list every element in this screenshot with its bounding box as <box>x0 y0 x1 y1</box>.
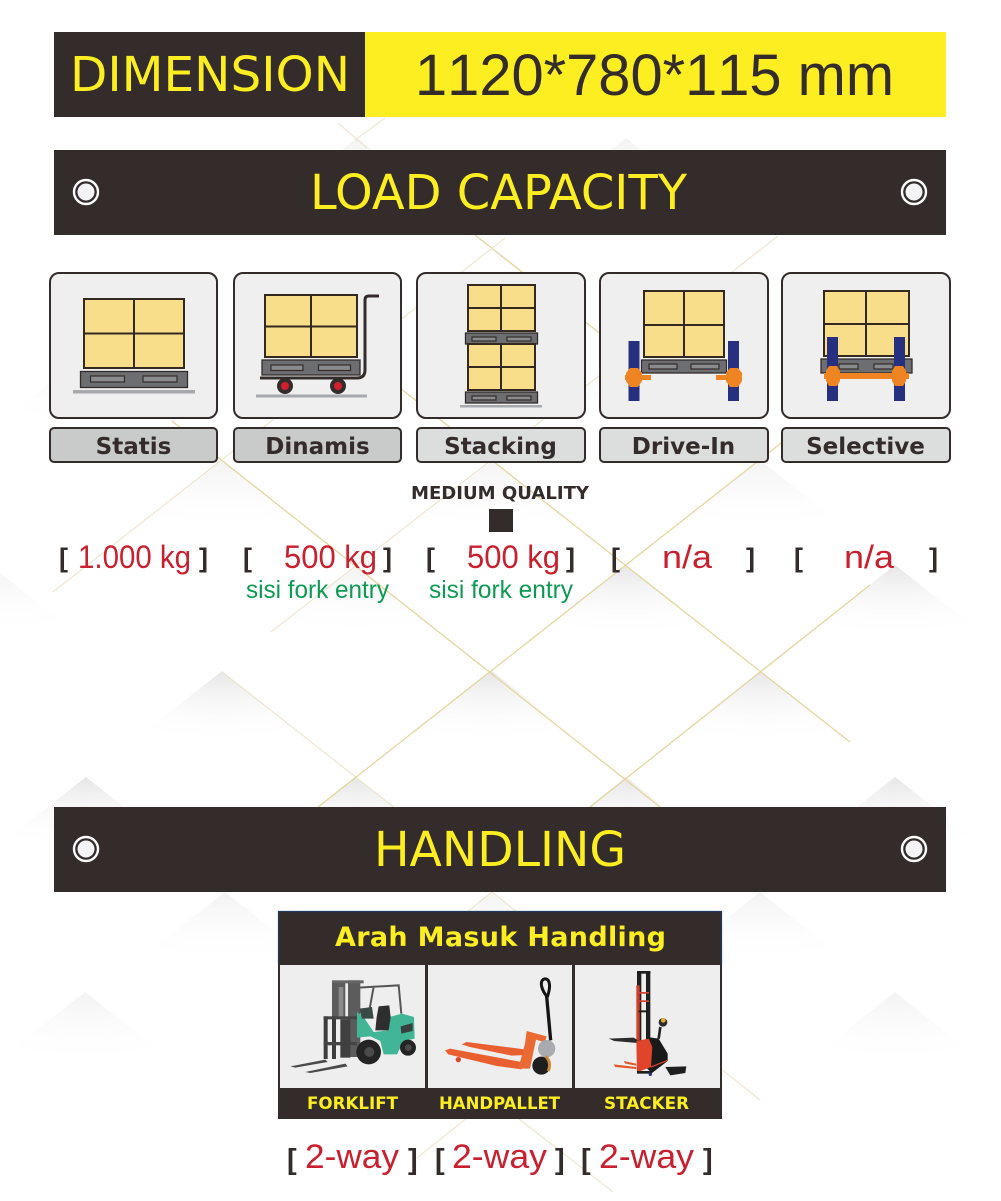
capacity: drive-in <box>611 539 755 575</box>
load capacity heading: LOAD CAPACITY <box>310 165 688 221</box>
handling direction: forklift: ] <box>408 1144 418 1176</box>
handling table <box>278 911 722 1119</box>
label: selective <box>782 428 950 462</box>
capacity: stacking <box>426 539 575 604</box>
medium quality note: MEDIUM QUALITY <box>411 483 590 504</box>
handling direction: stacker: 2-way <box>599 1138 694 1176</box>
handling direction: forklift: [ <box>287 1144 297 1176</box>
load capacity banner <box>54 150 946 235</box>
capacity: stacking: 500 kg <box>467 539 560 575</box>
medium quality note <box>411 483 590 532</box>
label: dinamis: Dinamis <box>265 434 370 460</box>
icon: handpallet <box>445 979 555 1075</box>
label: stacker: STACKER <box>604 1094 689 1113</box>
capacity: stacking: ] <box>566 543 575 573</box>
handling direction: handpallet: ] <box>555 1144 565 1176</box>
label: forklift: FORKLIFT <box>307 1094 399 1113</box>
handling direction: stacker <box>581 1138 713 1176</box>
capacity: dinamis: 500 kg <box>284 539 377 575</box>
handling direction: handpallet: 2-way <box>452 1138 547 1176</box>
capacity: dinamis: ] <box>383 543 392 573</box>
icon: stacker <box>609 971 686 1076</box>
cell: handpallet <box>428 965 572 1088</box>
handling direction: stacker: [ <box>581 1144 591 1176</box>
cell: forklift <box>280 965 425 1088</box>
dimension label: DIMENSION <box>70 47 350 103</box>
card: statis <box>50 273 217 418</box>
capacity: dinamis: [ <box>243 543 252 573</box>
capacity: drive-in: [ <box>611 543 620 573</box>
label: statis <box>50 428 217 462</box>
card: drive-in <box>600 273 768 418</box>
capacity: stacking: [ <box>426 543 435 573</box>
label: stacking <box>417 428 585 462</box>
dimension value: 1120*780*115 mm <box>415 43 894 108</box>
card: stacking <box>417 273 585 418</box>
capacity: selective: ] <box>929 543 938 573</box>
capacity: selective: [ <box>794 543 803 573</box>
capacity: drive-in: ] <box>746 543 755 573</box>
label: dinamis <box>234 428 401 462</box>
card: dinamis <box>234 273 401 418</box>
note: fork entry: sisi fork entry <box>429 576 573 604</box>
capacity: selective: n/a <box>844 539 894 575</box>
capacity: statis: [ <box>59 543 68 573</box>
label: selective: Selective <box>806 434 925 460</box>
handling direction: forklift: 2-way <box>305 1138 399 1176</box>
capacity: drive-in: n/a <box>662 539 712 575</box>
handling direction: handpallet <box>435 1138 565 1176</box>
label: statis: Statis <box>96 434 171 460</box>
capacity: selective <box>794 539 938 575</box>
capacity: statis: ] <box>199 543 208 573</box>
capacity: dinamis <box>243 539 392 604</box>
note: fork entry: sisi fork entry <box>246 576 389 604</box>
icon: forklift <box>290 980 416 1073</box>
card: selective <box>782 273 950 418</box>
handling direction: stacker: ] <box>703 1144 713 1176</box>
label: stacking: Stacking <box>444 434 557 460</box>
table heading: Arah Masuk Handling <box>335 922 666 953</box>
quality square <box>489 509 513 532</box>
handling banner <box>54 807 946 892</box>
handling heading: HANDLING <box>374 822 626 878</box>
handling direction: forklift <box>287 1138 418 1176</box>
cell: stacker <box>575 965 720 1088</box>
label: handpallet: HANDPALLET <box>439 1094 561 1113</box>
handling direction: handpallet: [ <box>435 1144 445 1176</box>
dimension bar <box>54 32 946 117</box>
label: drive-in: Drive-In <box>632 434 735 460</box>
label: drive-in <box>600 428 768 462</box>
capacity: statis: 1.000 kg <box>78 539 191 575</box>
